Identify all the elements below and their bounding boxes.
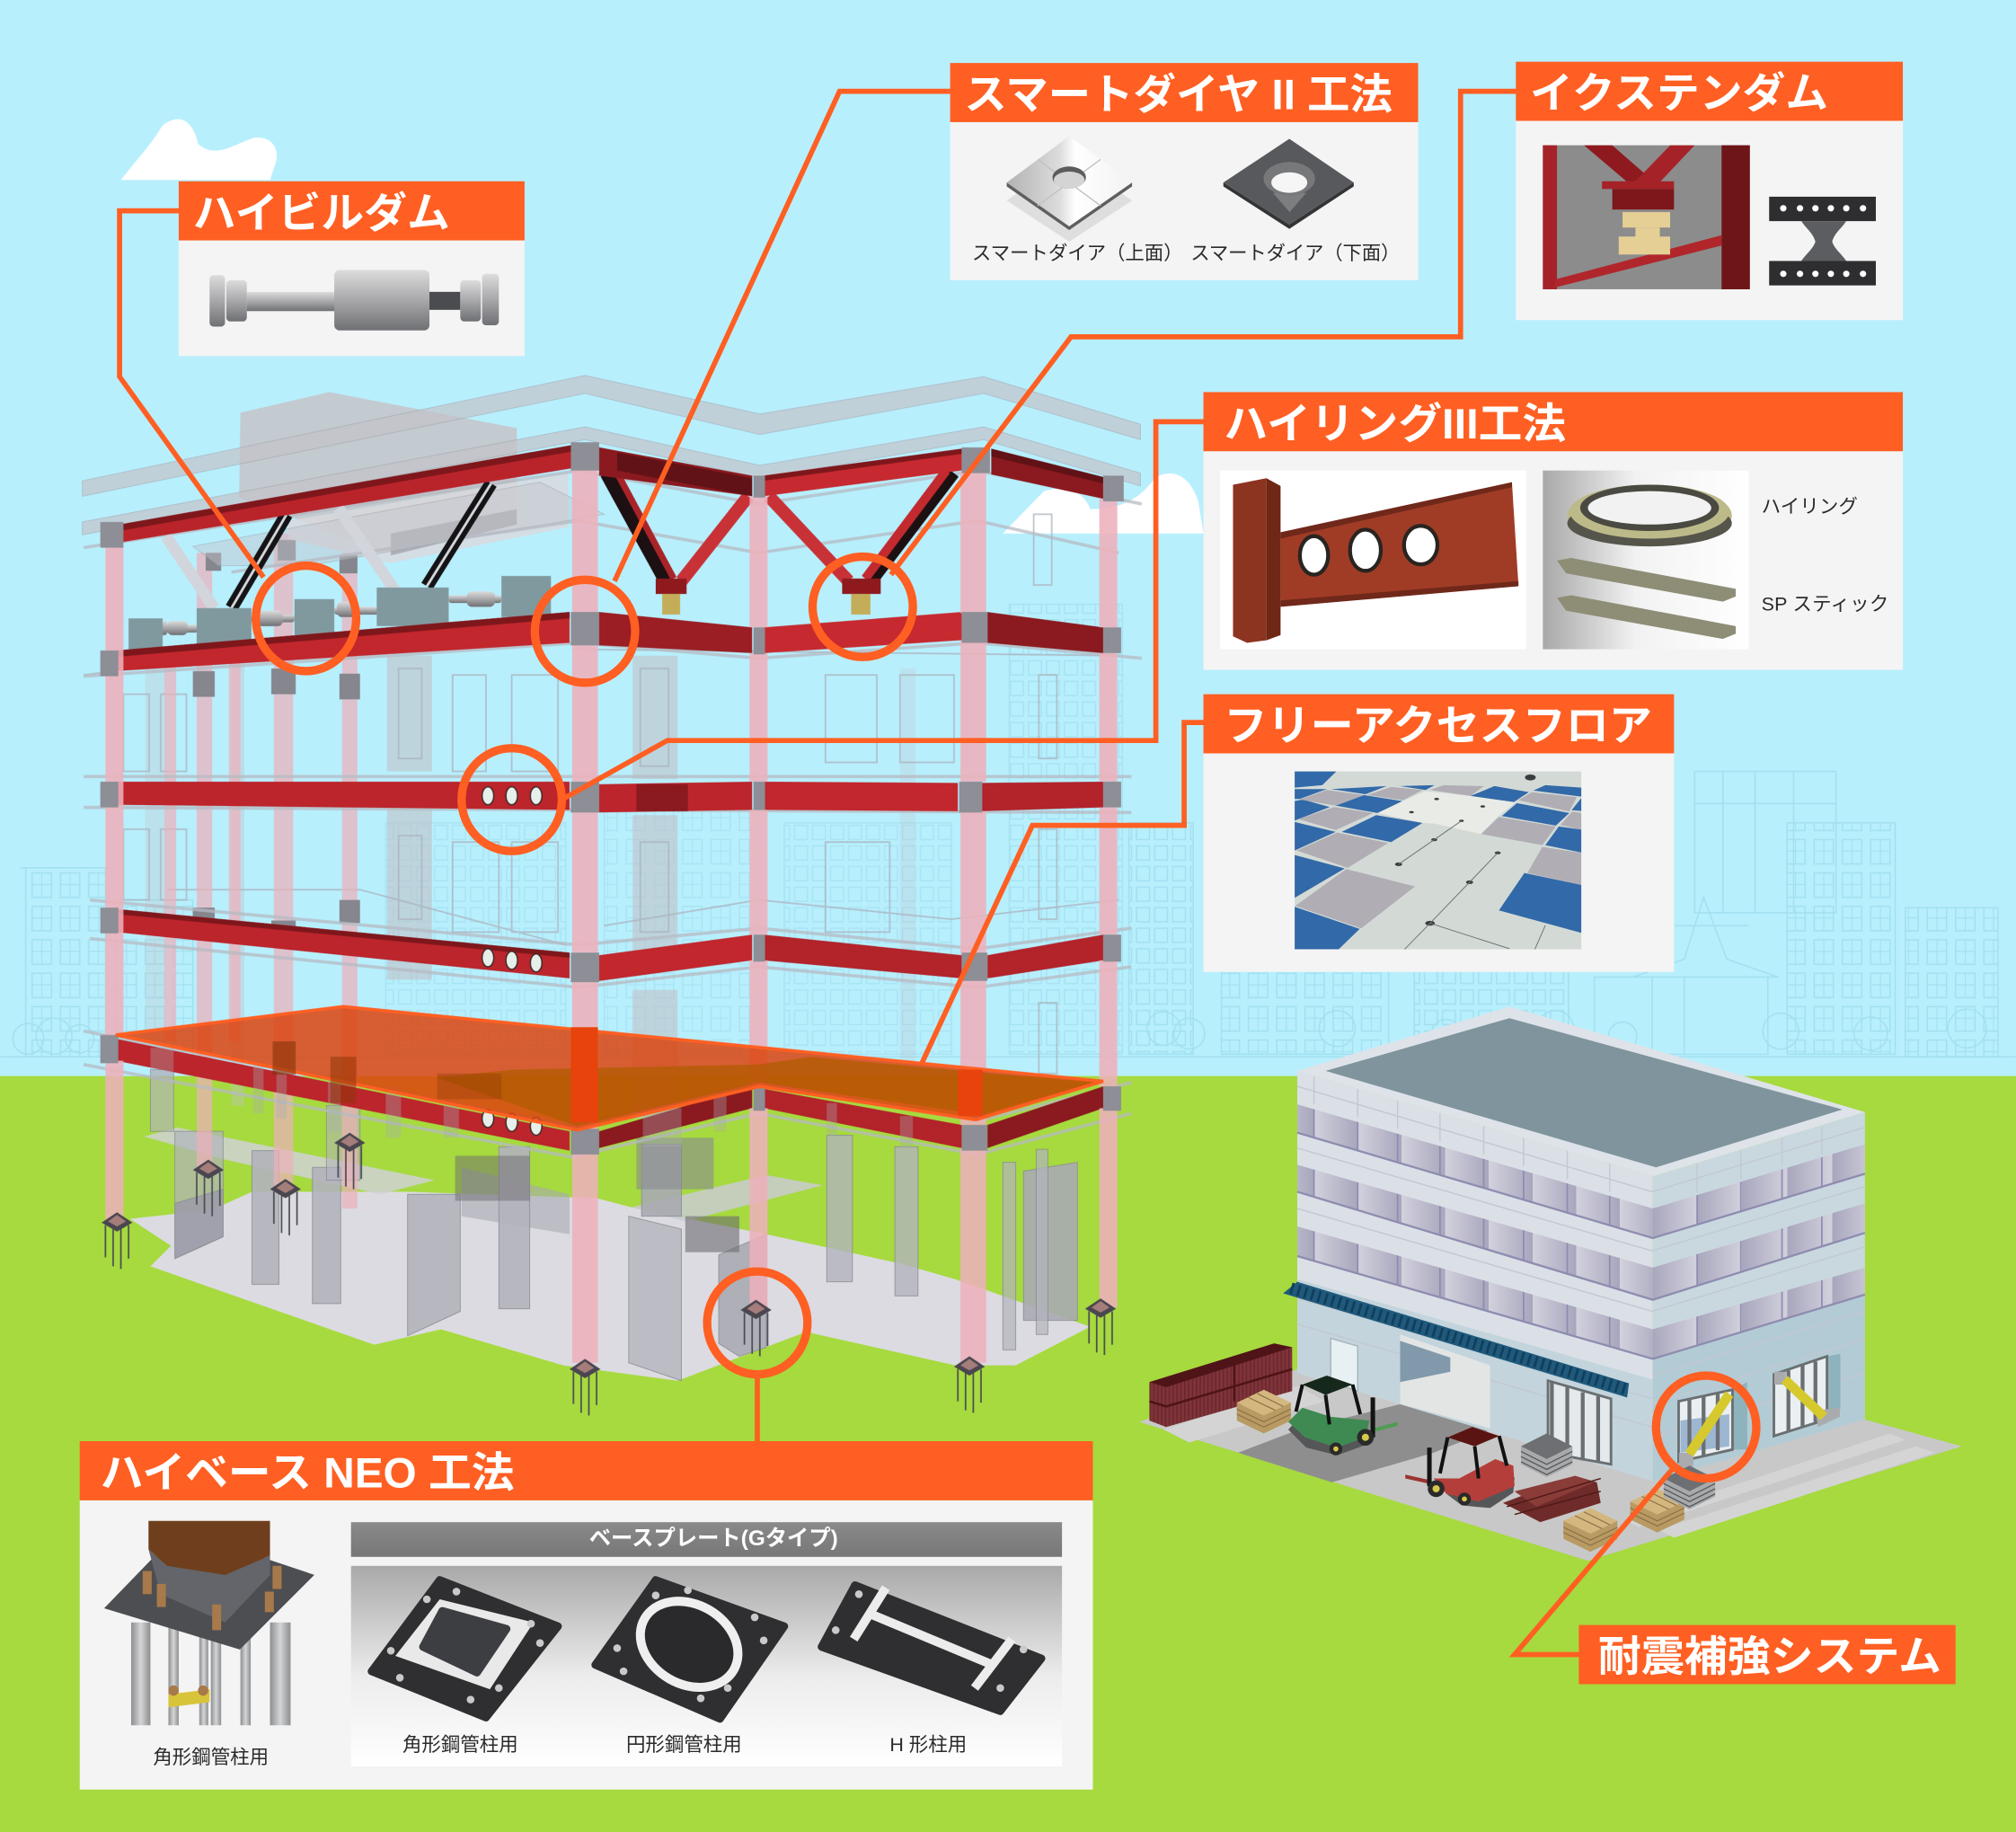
damper rods and boxes: [128, 576, 551, 650]
heading: ハイリングIII工法: ハイリングIII工法: [1224, 401, 1566, 448]
panel: ハイリング III 工法: [1204, 392, 1903, 669]
icon: round base plate: [596, 1580, 784, 1719]
braces: hi-build dam supports: [166, 483, 491, 608]
forklift red: [1405, 1427, 1515, 1508]
gradient backdrop: [351, 1566, 1062, 1766]
caption: H: H 形柱用: [889, 1734, 967, 1756]
caption: top: スマートダイア（上面）: [972, 243, 1183, 264]
translucent wall strips over lower beam: [150, 1048, 913, 1148]
beam level 3: [116, 782, 1103, 812]
beam level 1: [112, 445, 1103, 544]
clouds: [121, 119, 1204, 534]
pallets and piles: [1237, 1390, 1715, 1552]
isometric building: ground plaza: [1139, 1369, 1962, 1561]
slab edges at each floor: [84, 471, 1142, 1157]
lumber stack: [1503, 1476, 1601, 1522]
label: 耐震補強システム: 耐震補強システム: [1598, 1633, 1941, 1681]
icon: damper unit: [1769, 197, 1876, 286]
rooftop equipment box: [239, 392, 569, 563]
facade seams: [1297, 1076, 1864, 1438]
beam level 5: [116, 1039, 1103, 1151]
ground: [0, 1076, 2016, 1832]
heading: フリーアクセスフロア: フリーアクセスフロア: [1224, 703, 1652, 750]
entry opening: [1400, 1334, 1490, 1429]
container stack: [1149, 1343, 1292, 1427]
forklift green: [1288, 1376, 1398, 1456]
front window: [1548, 1381, 1611, 1465]
leader lines: [119, 92, 1676, 1655]
caption: round: 円形鋼管柱用: [626, 1734, 742, 1756]
beam level 2: [116, 612, 1103, 671]
sky background: [0, 0, 2016, 1077]
back columns: [164, 534, 360, 1208]
heading: ハイビルダム: ハイビルダム: [193, 190, 450, 237]
door: [1331, 1339, 1357, 1391]
column base footings: [102, 1133, 1116, 1415]
panel: スマートダイヤ II 工法: [951, 63, 1419, 280]
heading: スマートダイヤ II 工法: スマートダイヤ II 工法: [964, 72, 1393, 119]
beam level 4: [116, 909, 1103, 981]
concrete foundation slab: [130, 1128, 1091, 1381]
cityscape skyline: [0, 605, 2016, 1057]
heading: ハイベース NEO 工法: ハイベース NEO 工法: [101, 1450, 514, 1498]
awning: [1283, 1282, 1629, 1397]
icon: smart dia bottom plate: [1224, 139, 1354, 229]
icon: square base plate: [372, 1580, 558, 1718]
facade bands: [1297, 1093, 1865, 1363]
illustration: column base: [104, 1521, 314, 1725]
beam web openings: [482, 787, 542, 1135]
caption: bottom: スマートダイア（下面）: [1190, 243, 1400, 264]
illustration: extendam in frame: [1543, 146, 1750, 289]
window frames inside structure: [84, 514, 1119, 1074]
illustration: perforated beam: [1220, 471, 1526, 650]
icon: smart dia top plate: [1007, 137, 1132, 242]
caption: square: 角形鋼管柱用: [402, 1734, 518, 1756]
column joints: [101, 442, 1124, 1155]
illustration: hi-ring and SP stick: [1543, 471, 1748, 650]
panel: フリーアクセスフロア: [1204, 695, 1674, 972]
bar label: ベースプレート(Gタイプ): [589, 1527, 838, 1551]
caption: SP スティック: SP スティック: [1762, 594, 1888, 615]
icon: H base plate: [821, 1585, 1041, 1711]
heading: イクステンダム: イクステンダム: [1530, 70, 1828, 118]
steel beams: [112, 445, 1103, 1151]
callout rings: [256, 557, 1756, 1479]
icon: damper: [209, 270, 499, 331]
concrete walls and piers: [150, 1069, 1077, 1381]
isometric building body: [1283, 1006, 1865, 1481]
panel: ハイベース NEO 工法: [80, 1441, 1092, 1790]
caption: left column: 角形鋼管柱用: [153, 1747, 269, 1768]
bar: base plate G type: [351, 1522, 1062, 1557]
free access floor highlight: [116, 1006, 1103, 1130]
retrofit window left: [1678, 1382, 1747, 1469]
retrofit window right: [1774, 1354, 1841, 1436]
photo: floor panels: [1295, 772, 1581, 950]
interior walls behind frame: [146, 656, 915, 1119]
main columns: [105, 469, 1118, 1363]
caption: ハイリング: ハイリング: [1762, 496, 1858, 518]
panel: イクステンダム: [1516, 62, 1903, 320]
panel: ハイビルダム: [179, 181, 525, 356]
V braces with extendam: [606, 471, 954, 615]
roof slab (translucent): [83, 376, 1140, 566]
roof: [1297, 1006, 1865, 1176]
